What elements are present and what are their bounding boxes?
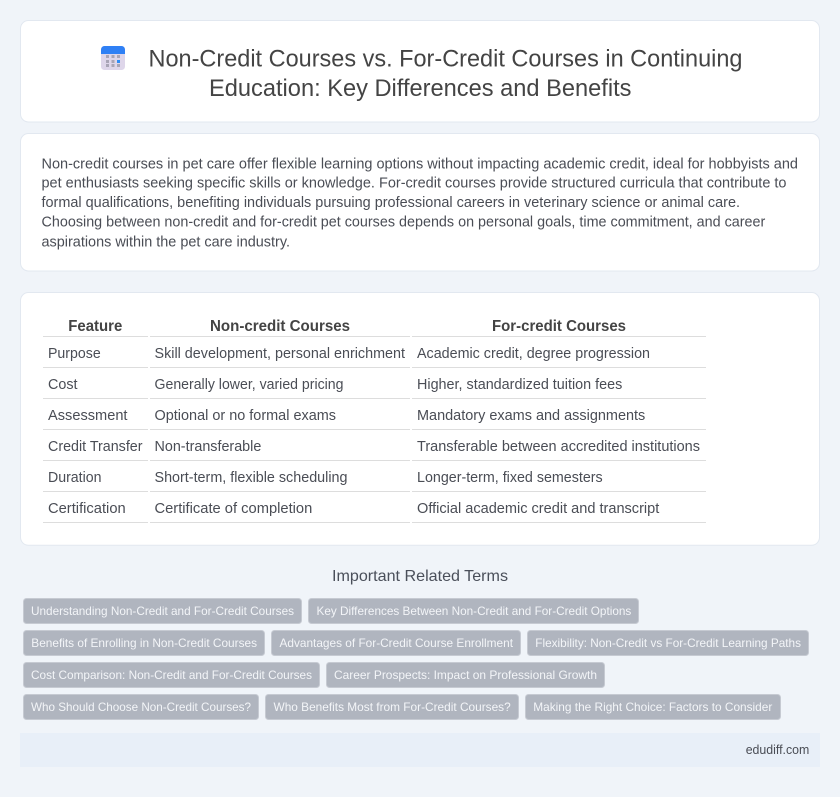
- table header: [68, 318, 626, 335]
- table row: cost: Cost: [48, 377, 78, 393]
- tag: Advantages of For-Credit Course Enrollment: [280, 636, 514, 650]
- footer: [20, 733, 820, 767]
- icon: calendar: [101, 46, 125, 70]
- table header: Feature: [68, 318, 122, 335]
- text block: introduction paragraph: Non-credit courses in pet care offer flexible learning options without impacting academic credit, ideal for hobbyists and: [42, 155, 798, 172]
- table row: assessment: Assessment: [48, 408, 127, 424]
- tag: [24, 630, 264, 656]
- panel: introduction: [20, 134, 820, 271]
- table row: cost: [48, 377, 622, 393]
- table header: Non-credit Courses: [210, 318, 350, 335]
- text block: introduction paragraph: [42, 155, 798, 250]
- title: Non-Credit Courses vs. For-Credit Courses in Continuing: [148, 46, 742, 72]
- table row: purpose: Academic credit, degree progression: [417, 346, 650, 362]
- table row: duration: Short-term, flexible scheduling: [154, 470, 348, 486]
- table row: purpose: Purpose: [48, 346, 101, 362]
- table row: cost: Higher, standardized tuition fees: [417, 377, 622, 393]
- table row: certification: Certification: [48, 501, 126, 517]
- text block: introduction paragraph: aspirations within the pet care industry.: [42, 233, 290, 250]
- tag: Making the Right Choice: Factors to Consider: [533, 700, 772, 714]
- title: [148, 46, 742, 102]
- title: Education: Key Differences and Benefits: [209, 75, 632, 102]
- tag: [24, 694, 258, 720]
- table header: For-credit Courses: [492, 318, 626, 335]
- footer: edudiff.com: [746, 742, 809, 757]
- tag: Career Prospects: Impact on Professional Growth: [334, 668, 597, 682]
- table row: certification: Certificate of completion: [154, 501, 312, 517]
- tag: [24, 598, 302, 624]
- table row: assessment: [48, 408, 645, 424]
- table row: credit transfer: Credit Transfer: [48, 439, 143, 455]
- table row: credit transfer: Transferable between accredited institutions: [417, 439, 700, 455]
- tag: Key Differences Between Non-Credit and For-Credit Options: [316, 604, 631, 618]
- tag: Benefits of Enrolling in Non-Credit Courses: [31, 636, 257, 650]
- table row: credit transfer: Non-transferable: [154, 439, 261, 455]
- tag: [528, 630, 808, 656]
- tag: [308, 598, 638, 624]
- tag: [266, 694, 518, 720]
- panel: comparison table: [20, 292, 820, 545]
- text block: introduction paragraph: pet enthusiasts seeking specific skills or knowledge. For-credit courses provide structured curricula that contribute to: [42, 175, 786, 192]
- panel: title header: [20, 20, 820, 122]
- table row: certification: Official academic credit and transcript: [417, 501, 659, 517]
- table row: certification: [48, 501, 659, 517]
- table row: assessment: Optional or no formal exams: [154, 408, 336, 424]
- tag: Who Benefits Most from For-Credit Courses?: [274, 700, 511, 714]
- text block: introduction paragraph: formal qualifications, benefiting individuals pursuing professional careers in veterinary science or animal care.: [42, 194, 740, 211]
- table row: cost: Generally lower, varied pricing: [154, 377, 344, 393]
- tag: [526, 694, 780, 720]
- table row: credit transfer: [48, 439, 700, 455]
- heading: important related terms: Important Related Terms: [332, 568, 508, 585]
- tag: Who Should Choose Non-Credit Courses?: [31, 700, 251, 714]
- table row: purpose: [48, 346, 650, 362]
- table row: purpose: Skill development, personal enrichment: [154, 346, 405, 362]
- tag: [24, 662, 320, 688]
- tag: Understanding Non-Credit and For-Credit Courses: [31, 604, 294, 618]
- table row: duration: Duration: [48, 470, 102, 486]
- table row: assessment: Mandatory exams and assignments: [417, 408, 645, 424]
- table row: duration: Longer-term, fixed semesters: [417, 470, 603, 486]
- tag: [326, 662, 604, 688]
- text block: introduction paragraph: Choosing between non-credit and for-credit pet courses depends on personal goals, time commitment, and career: [42, 214, 765, 231]
- table row: duration: [48, 470, 603, 486]
- panel: related term tags: [24, 598, 808, 720]
- tag: Cost Comparison: Non-Credit and For-Credit Courses: [31, 668, 312, 682]
- tag: [272, 630, 520, 656]
- tag: Flexibility: Non-Credit vs For-Credit Learning Paths: [535, 636, 801, 650]
